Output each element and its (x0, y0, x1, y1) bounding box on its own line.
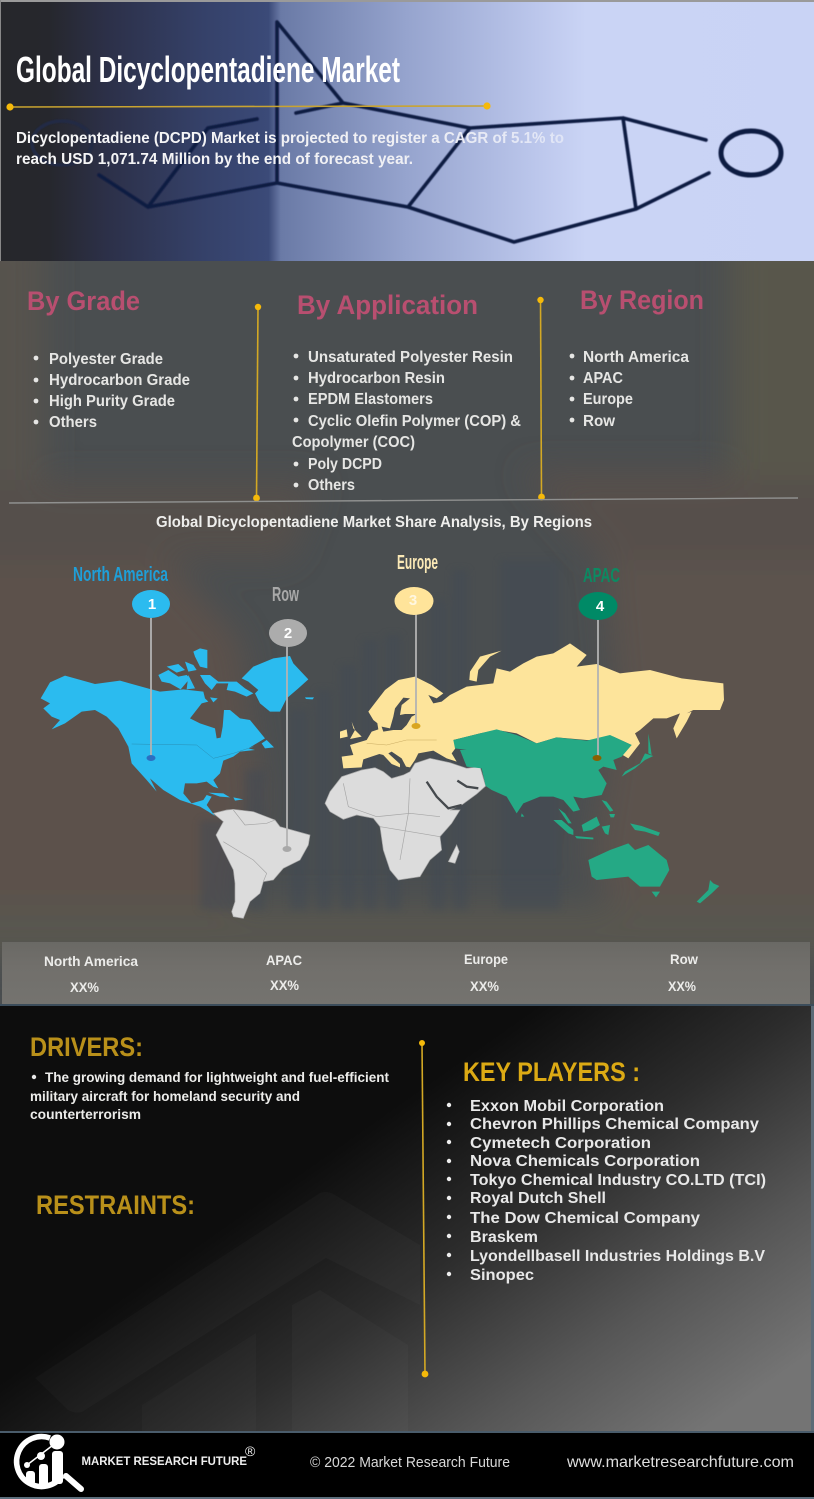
segment: by region (570, 285, 704, 430)
intro text: Dicyclopentadiene (DCPD) Market is projected to register a CAGR of 5.1% to (16, 130, 564, 147)
callout: apac: APAC (583, 565, 620, 587)
callout: row (269, 584, 307, 852)
callout: north america (73, 564, 170, 761)
heading: by application: By Application (297, 290, 478, 320)
copyright: © 2022 Market Research Future (310, 1454, 510, 1471)
list: applications: Poly DCPD (308, 456, 382, 473)
segment: by grade (27, 286, 190, 431)
list: applications: Others (308, 477, 355, 494)
callout: europe: 3 (409, 592, 417, 609)
callout: north america: North America (73, 564, 169, 586)
brand name: MARKET RESEARCH FUTURE (82, 1456, 247, 1468)
heading: by grade: By Grade (27, 286, 140, 316)
callout: europe: Europe (397, 552, 438, 574)
list: applications: Copolymer (COC) (292, 434, 415, 451)
heading: restraints: RESTRAINTS: (36, 1190, 195, 1220)
heading: by region: By Region (580, 285, 704, 315)
list: grades: Hydrocarbon Grade (49, 372, 190, 389)
share: north america: XX% (70, 979, 100, 995)
icon: market research future logo (17, 1434, 81, 1489)
list: regions: North America (583, 349, 689, 366)
callout: apac: 4 (596, 598, 605, 615)
list: key players (447, 1098, 766, 1284)
title: Global Dicyclopentadiene Market (16, 49, 400, 90)
callout: europe (394, 552, 438, 729)
list: key players: Royal Dutch Shell (470, 1190, 606, 1207)
callout: north america: 1 (148, 596, 156, 613)
list: grades: Polyester Grade (49, 351, 163, 368)
list: applications: EPDM Elastomers (308, 391, 433, 408)
list: applications: Cyclic Olefin Polymer (COP) & (308, 413, 521, 430)
share: row (668, 951, 698, 994)
list: applications: Hydrocarbon Resin (308, 370, 445, 387)
list: key players: Exxon Mobil Corporation (470, 1098, 664, 1115)
share: europe: XX% (470, 978, 500, 994)
panel: regional share table (0, 942, 814, 1006)
icon: dicyclopentadiene molecule (32, 22, 781, 242)
list: key players: Sinopec (470, 1267, 534, 1284)
world map (41, 643, 724, 918)
list: key players: The Dow Chemical Company (470, 1210, 700, 1227)
list: regions (570, 349, 689, 430)
list: key players: Lyondellbasell Industries Holdings B.V (470, 1248, 765, 1265)
list: key players: Chevron Phillips Chemical Company (470, 1116, 759, 1133)
list: grades (34, 351, 190, 431)
map region: south america and row (213, 758, 486, 918)
share: apac: XX% (270, 977, 300, 993)
title divider with end dots (6, 102, 491, 111)
map heading: Global Dicyclopentadiene Market Share Analysis, By Regions (156, 514, 592, 531)
list: applications (292, 349, 521, 494)
share: north america (44, 953, 138, 995)
callout: row: 2 (284, 625, 292, 642)
list: key players: Tokyo Chemical Industry CO.LTD (TCI) (470, 1172, 766, 1189)
share: europe: Europe (464, 951, 508, 967)
list: regions: Row (583, 413, 616, 430)
map region: europe and russia (340, 643, 724, 768)
list: regions: APAC (583, 370, 623, 387)
list: key players: Cymetech Corporation (470, 1135, 651, 1152)
share: apac (266, 952, 302, 993)
share: north america: North America (44, 953, 138, 969)
segment: by application (292, 290, 521, 494)
website: www.marketresearchfuture.com (566, 1454, 794, 1471)
list: applications: Unsaturated Polyester Resin (308, 349, 513, 366)
text: drivers bullet: military aircraft for homeland security and (30, 1088, 300, 1104)
panel: segmentation and map background (0, 261, 814, 957)
callout: row: Row (272, 584, 299, 606)
list: key players: Nova Chemicals Corporation (470, 1153, 700, 1170)
text: drivers bullet: The growing demand for lightweight and fuel-efficient (45, 1069, 389, 1085)
share: apac: APAC (266, 952, 302, 968)
registered mark: ® (245, 1443, 256, 1459)
list: key players: Braskem (470, 1229, 538, 1246)
list: grades: High Purity Grade (49, 393, 175, 410)
panel: footer (0, 1431, 814, 1499)
share: europe (464, 951, 508, 994)
column dividers (9, 297, 798, 503)
panel: header (0, 0, 814, 261)
list: regions: Europe (583, 391, 633, 408)
intro text (16, 130, 564, 168)
callout: apac (578, 565, 620, 761)
list: grades: Others (49, 414, 97, 431)
panel: drivers restraints key players (0, 1006, 814, 1432)
map region: apac (453, 729, 719, 903)
text: drivers bullet (30, 1069, 389, 1122)
decorative bar chart in photo backdrop (202, 774, 260, 908)
map region: north america (41, 648, 314, 816)
intro text: reach USD 1,071.74 Million by the end of forecast year. (16, 151, 413, 168)
heading: drivers: DRIVERS: (30, 1032, 143, 1062)
text: drivers bullet: counterterrorism (30, 1106, 141, 1122)
heading: key players: KEY PLAYERS : (463, 1057, 640, 1087)
share: row: Row (670, 951, 698, 967)
share: row: XX% (668, 978, 696, 994)
center divider (419, 1040, 428, 1377)
